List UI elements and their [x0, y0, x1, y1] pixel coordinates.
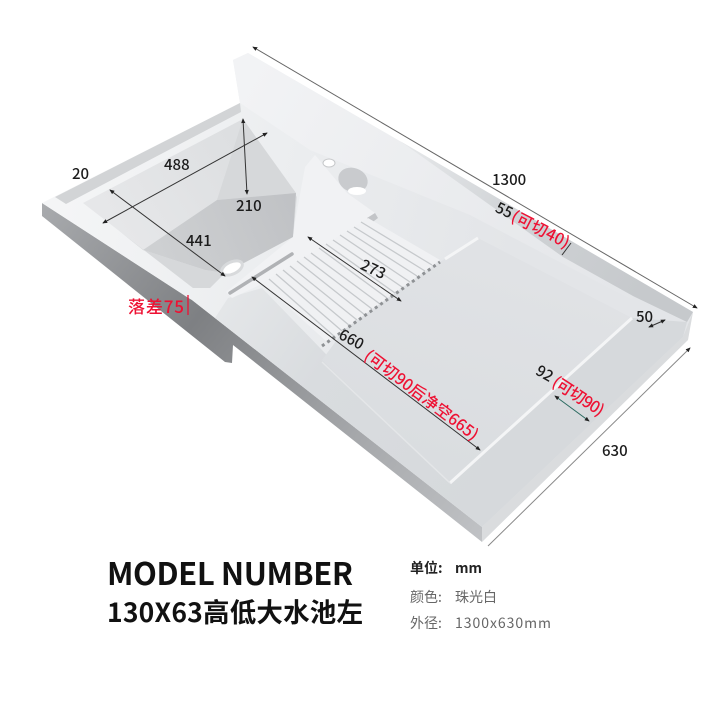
- title: MODEL NUMBER: [107, 549, 353, 594]
- specifications: 颜色:: [410, 587, 442, 607]
- red annotations: (可切90后净空665): [360, 343, 485, 445]
- red annotations: [128, 203, 610, 445]
- dimension labels: 55: [492, 197, 517, 223]
- sink body: [42, 53, 693, 542]
- dimension labels: 20: [72, 163, 89, 184]
- dimension labels: 660: [335, 324, 368, 354]
- basin floor: [143, 193, 296, 273]
- red annotations: (可切90): [548, 369, 610, 421]
- dimension labels: 92: [532, 360, 557, 387]
- dimension labels: 441: [186, 230, 212, 251]
- dimension labels: 488: [164, 154, 190, 175]
- right drying recess: [322, 238, 632, 483]
- tap plate and washboard ridge: [226, 155, 378, 298]
- red annotations: 落差75: [128, 293, 184, 318]
- left rim groove: [55, 103, 241, 204]
- backsplash face: [233, 53, 640, 300]
- specifications: 外径:: [410, 613, 442, 633]
- basin right wall: [217, 119, 296, 200]
- specifications: 1300x630mm: [455, 613, 551, 633]
- dimension labels: 50: [636, 306, 653, 327]
- basin: [83, 119, 297, 288]
- dimension labels: 1300: [492, 169, 526, 190]
- dimension labels: 210: [236, 195, 262, 216]
- dimension labels: 273: [357, 254, 389, 284]
- serrated edge: [322, 262, 440, 346]
- title: [107, 549, 363, 630]
- drain: [219, 258, 245, 278]
- specifications: 珠光白: [455, 587, 497, 607]
- basin front wall: [118, 230, 225, 288]
- right side face: [482, 312, 693, 542]
- specifications: [410, 558, 551, 633]
- front border of the surface: [215, 288, 687, 527]
- title: 130X63高低大水池左: [107, 591, 363, 630]
- rear wall strip: [400, 141, 693, 322]
- dimension lines: [103, 47, 697, 546]
- top surface: [42, 53, 693, 527]
- red annotations: (可切40): [508, 203, 575, 253]
- dimension labels: 630: [602, 440, 628, 461]
- front side face: [42, 203, 482, 542]
- specifications: mm: [455, 558, 482, 578]
- dimension labels: [72, 154, 653, 461]
- washboard ribs: [262, 218, 440, 346]
- specifications: 单位:: [410, 558, 443, 578]
